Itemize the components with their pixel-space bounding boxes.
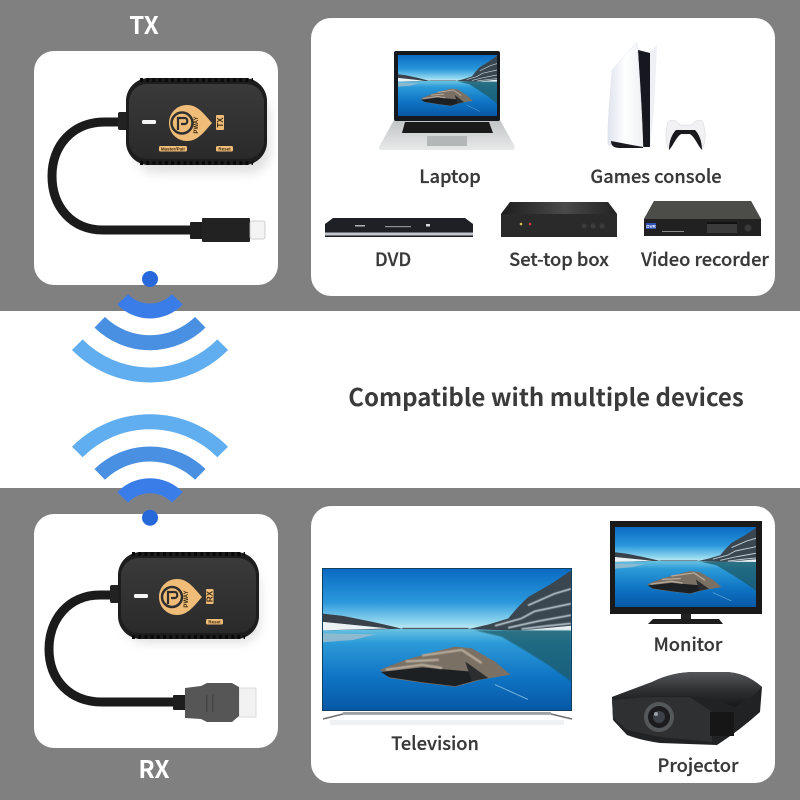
icon: DVD player [325,218,473,237]
icon: RX adapter with HDMI plug: Reset [208,620,221,624]
icon: TX adapter with USB-C plug: TX [216,117,225,128]
icon: PWAY logo [159,579,202,615]
icon: video recorder: DVR [646,224,656,229]
icon: set-top box [501,202,617,237]
icon: PWAY logo [169,105,212,141]
icon: RX adapter with HDMI plug: RX [206,590,214,602]
wifi signal: RX [77,422,223,526]
icon: games console and controller [608,42,705,150]
heading: TX: TX [129,6,159,41]
icon: laptop [379,51,515,150]
label: Video recorder: Video recorder [640,246,769,272]
icon: PWAY logo: PWAY [194,116,200,134]
label: DVD: DVD [375,246,411,272]
icon: TX adapter with USB-C plug: Master/Pair [161,146,185,152]
icon: TX adapter with USB-C plug [52,78,270,242]
icon: television [322,568,572,725]
label: Laptop: Laptop [419,163,481,189]
white centre band [0,311,800,488]
label: Set-top box: Set-top box [509,246,609,272]
panel: source devices [311,18,775,296]
title: compatibility statement: Compatible with multiple devices [348,378,744,413]
label: Monitor: Monitor [654,631,723,657]
panel: TX device [34,51,278,285]
heading: RX: RX [138,750,170,785]
label: Television: Television [391,730,479,756]
label: Projector: Projector [658,752,739,778]
label: Games console: Games console [590,163,722,189]
panel: RX device [34,514,278,748]
icon: PWAY logo: PWAY [184,590,190,608]
icon: video recorder [644,201,761,236]
icon: RX adapter with HDMI plug [49,552,260,722]
icon: TX adapter with USB-C plug: Reset [218,146,231,152]
icon: monitor [610,521,762,624]
wifi signal: TX [77,271,223,375]
panel: display devices [311,506,775,783]
icon: projector [612,672,762,745]
